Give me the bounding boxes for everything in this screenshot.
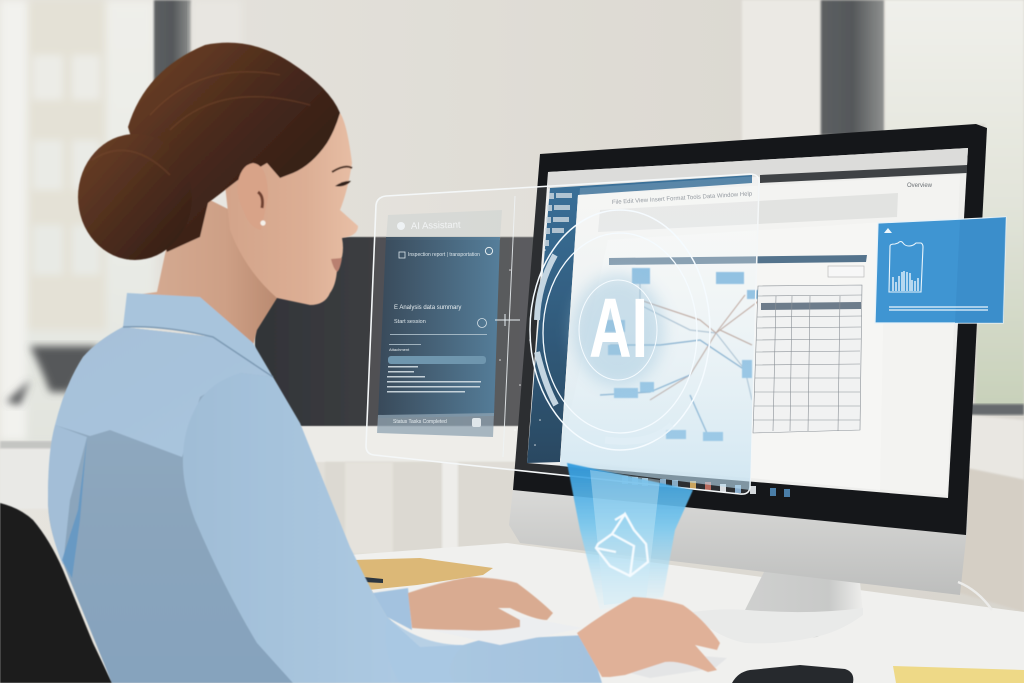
black bezel <box>513 124 987 535</box>
monitor stand <box>693 570 863 643</box>
screen <box>527 148 968 498</box>
left dark pane <box>377 210 502 437</box>
card lines <box>889 307 988 310</box>
monitor <box>509 124 987 643</box>
connector tick <box>495 314 520 326</box>
chair <box>0 503 112 683</box>
left cuff <box>373 588 412 630</box>
eye and brow <box>332 167 352 172</box>
right hand on mouse <box>577 597 720 677</box>
browser top bars <box>548 148 968 189</box>
icon: bar chart tag <box>889 242 923 292</box>
neck <box>127 195 290 346</box>
blue sidebar <box>527 175 752 463</box>
collar <box>123 293 273 377</box>
sidebar icons <box>544 193 572 246</box>
pane lines of text <box>399 252 405 258</box>
ear <box>237 163 268 230</box>
phone on desk <box>732 665 853 683</box>
right window frame <box>821 0 884 135</box>
toolbar text: File Edit View Insert Format Tools Data Window Help <box>612 191 753 206</box>
inner divider <box>503 196 515 457</box>
left dark pane: Attachment <box>389 347 410 352</box>
left hand on keyboard <box>408 577 553 631</box>
data table <box>753 285 862 433</box>
shirt yoke <box>55 327 273 457</box>
starry particles <box>499 249 546 446</box>
map button <box>828 266 864 277</box>
haze behind AI <box>572 274 664 386</box>
left dark pane: E Analysis data summary <box>394 305 461 311</box>
left window with blurred building <box>0 0 155 445</box>
right window <box>885 0 1024 405</box>
left window frame <box>154 0 191 120</box>
icon: recycling shape in the beam <box>596 514 648 576</box>
holographic panel <box>366 174 759 494</box>
hair <box>128 43 340 252</box>
power cable <box>958 582 992 610</box>
sticky note on desk <box>893 666 1024 683</box>
shirt arm <box>183 373 602 683</box>
document <box>560 222 885 490</box>
hair bun <box>78 134 192 260</box>
shirt back <box>48 327 300 683</box>
lips <box>331 258 342 272</box>
dark object behind left shoulder <box>6 346 100 405</box>
woman <box>0 43 727 683</box>
back pleat <box>48 425 87 565</box>
right glow zone <box>560 176 758 490</box>
left dark pane: Status Tasks Completed <box>393 419 447 425</box>
AI label: AI <box>589 281 648 375</box>
yellow folder on desk <box>353 558 493 590</box>
blue info card with chart icon <box>875 217 1006 323</box>
map header <box>609 255 867 265</box>
map <box>600 268 761 441</box>
screen: Overview <box>907 183 933 189</box>
desk <box>350 543 1024 683</box>
pane title: AI Assistant <box>411 220 461 232</box>
mouse <box>630 655 727 678</box>
face <box>225 113 358 305</box>
chin <box>509 480 968 595</box>
back counter <box>0 441 60 449</box>
left dark pane: Start session <box>394 319 426 325</box>
wall panels <box>192 0 242 240</box>
beam of light from keyboard <box>567 463 693 610</box>
taskbar icons <box>622 476 790 497</box>
white document area <box>560 175 960 495</box>
earring <box>260 220 266 226</box>
forearm shadow <box>385 617 463 683</box>
AI rings <box>530 210 710 450</box>
hair strands <box>150 72 310 130</box>
icon: small triangle <box>884 228 892 233</box>
dark partition behind monitor <box>255 237 535 427</box>
left dark pane: Inspection report | transportation <box>408 252 480 258</box>
keyboard <box>430 617 583 645</box>
